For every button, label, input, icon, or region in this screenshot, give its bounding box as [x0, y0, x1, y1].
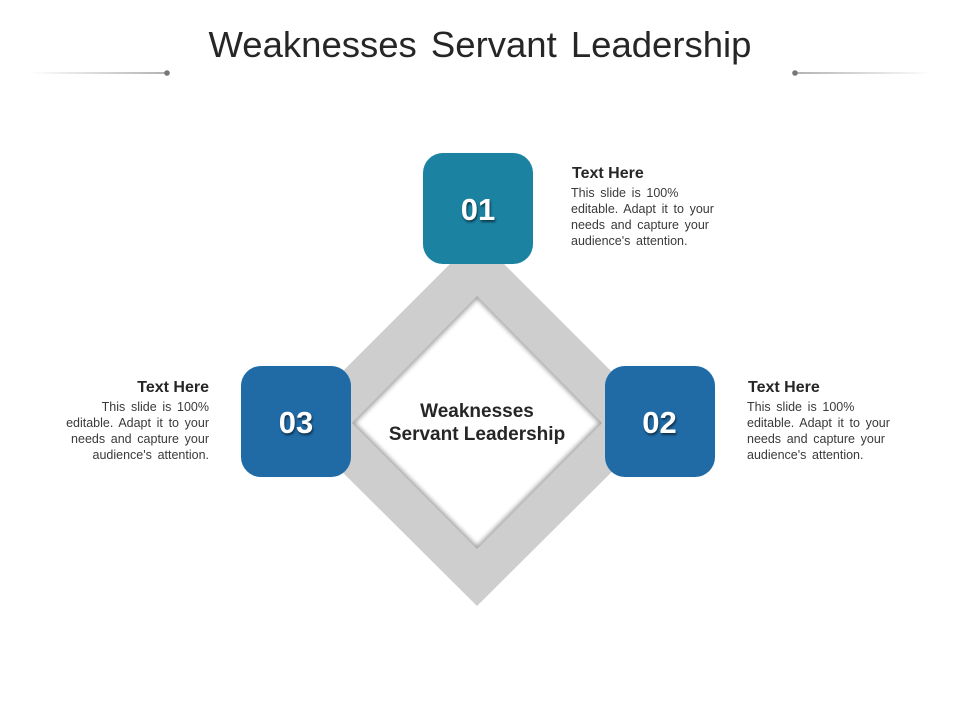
title: Weaknesses Servant Leadership [208, 24, 751, 65]
number box 02: 02 [642, 405, 677, 440]
text block 01: This slide is 100% [571, 186, 678, 200]
number box 03: 03 [279, 405, 313, 440]
text block 02: needs and capture your [747, 432, 885, 446]
text block 03: needs and capture your [71, 432, 209, 446]
text block 02: This slide is 100% [747, 400, 854, 414]
text block 03: audience's attention. [93, 448, 209, 462]
center label [389, 401, 565, 445]
text block 02 [747, 379, 890, 462]
text block 01 [571, 165, 714, 248]
text block 03: editable. Adapt it to your [66, 416, 209, 430]
number box 01 [423, 153, 533, 264]
text block 02: Text Here [748, 379, 820, 396]
number box 02 [604, 366, 714, 477]
left title ornament [37, 70, 170, 76]
center label: Servant Leadership [389, 424, 565, 445]
text block 02: editable. Adapt it to your [747, 416, 890, 430]
text block 01: audience's attention. [571, 234, 687, 248]
outer grey diamond [292, 237, 662, 606]
text block 03: Text Here [137, 379, 209, 396]
text block 03 [66, 379, 209, 462]
text block 03: This slide is 100% [102, 400, 209, 414]
number box 01: 01 [461, 192, 495, 227]
text block 01: editable. Adapt it to your [571, 202, 714, 216]
inner white diamond with inset shadow [352, 296, 602, 549]
text block 01: needs and capture your [571, 218, 709, 232]
number box 03 [241, 366, 351, 477]
diamond ring graphic [343, 264, 612, 606]
right title ornament [792, 70, 924, 76]
text block 01: Text Here [572, 165, 644, 182]
text block 02: audience's attention. [747, 448, 863, 462]
center label: Weaknesses [420, 401, 534, 422]
